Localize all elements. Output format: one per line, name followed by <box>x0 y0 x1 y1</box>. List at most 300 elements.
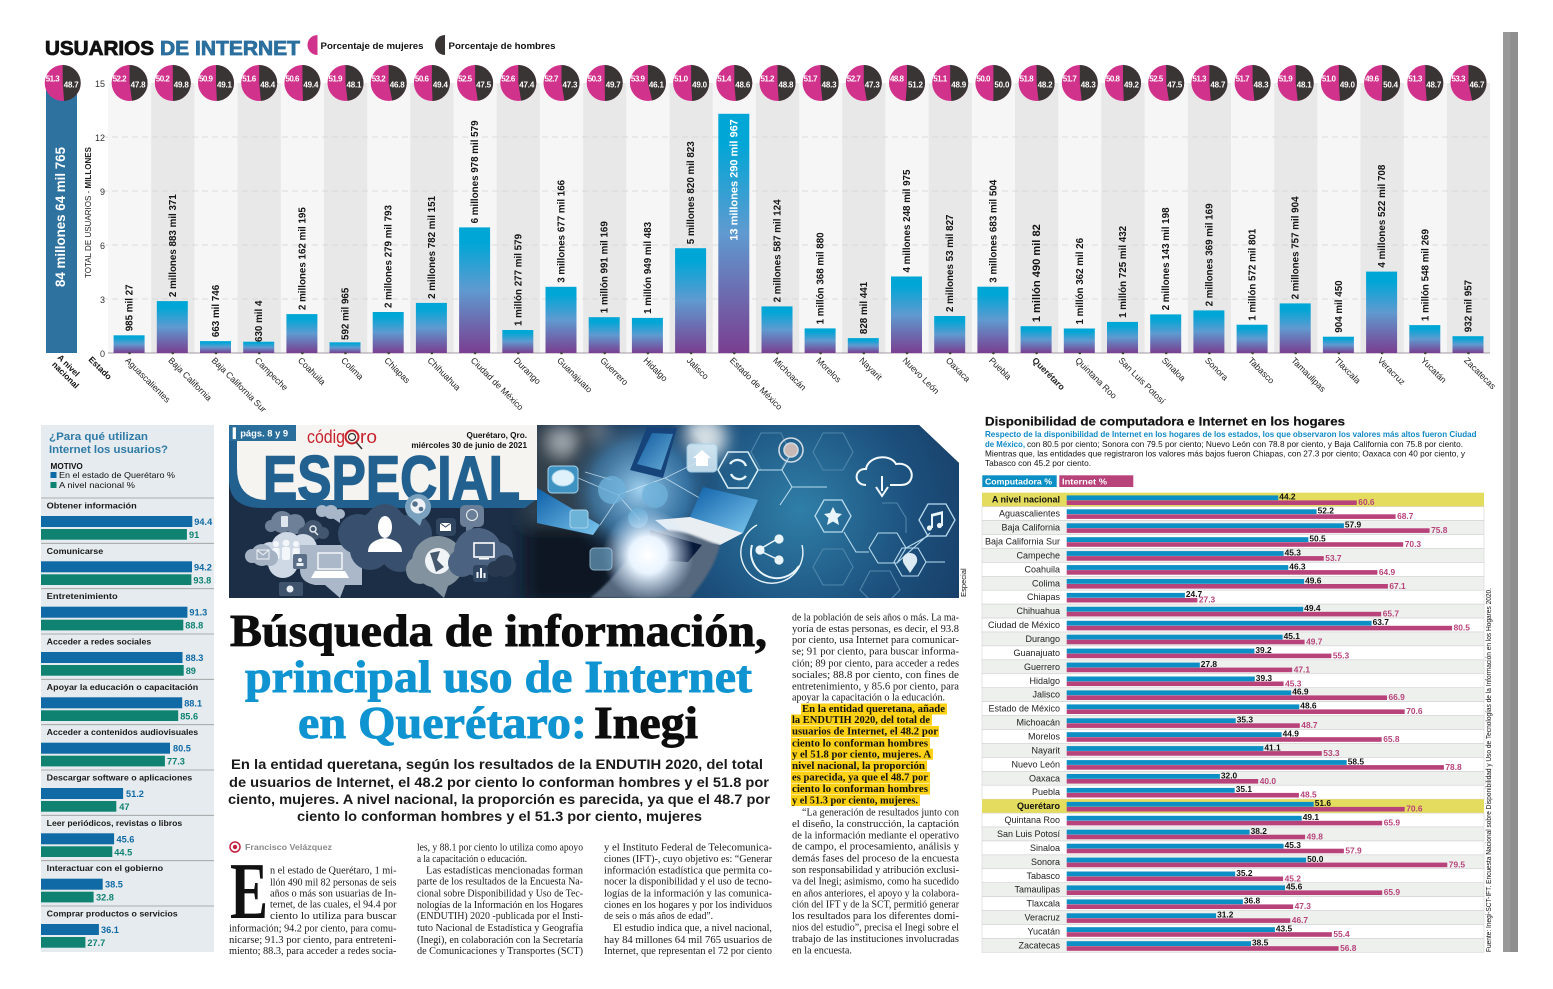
row: Morelos: 65.8 <box>1383 734 1400 744</box>
article column 4 continued: en años anteriores, el apoyo y la colabora- <box>792 888 960 899</box>
row: Sonora: 50.0 <box>1307 854 1324 864</box>
legend: internet <box>1059 475 1133 487</box>
article column 1: ternet, de las cuales, el 94.4 por <box>270 900 397 911</box>
column: Baja California: 2 millones 883 mil 371 <box>168 194 179 297</box>
article column 4: entretenimiento, y 85.6 por ciento, para <box>792 682 959 693</box>
column: Baja California: 50.2 <box>156 74 170 84</box>
article column 4: ción; 89 por ciento, para acceder a redes <box>792 658 959 669</box>
row: leer periódicos: Leer periódicos, revistas o libros <box>47 818 182 828</box>
row: Nuevo León <box>982 756 1484 772</box>
article column 4 continued: son responsabilidad y atribución exclusi- <box>792 865 960 876</box>
column: Puebla: Puebla <box>987 355 1014 382</box>
column: Chiapas: 46.8 <box>390 80 405 90</box>
column: Oaxaca: 2 millones 53 mil 827 <box>945 214 956 312</box>
column: Campeche: Campeche <box>253 355 290 393</box>
row: Hidalgo <box>982 673 1484 688</box>
article column 2: nologías de la Información en los Hogares <box>417 900 583 911</box>
row: apoyar la educación <box>41 679 214 721</box>
source note: Fuente: Inegi-SCT-IFT. Encuesta Nacional sobre Disponibilidad y Uso de Tecnologías de la Información en los Hogares 2020. <box>1484 588 1493 952</box>
row: Baja California Sur: 50.5 <box>1309 534 1326 544</box>
y axis labels: 0 <box>100 349 105 359</box>
row: Colima: Colima <box>1032 578 1060 588</box>
row: Puebla <box>982 784 1484 800</box>
page tab <box>229 425 296 441</box>
y axis labels <box>83 79 105 359</box>
article column 2 <box>417 842 584 957</box>
national total bar: 51.3 <box>46 74 60 84</box>
legend: porcentaje de mujeres: Porcentaje de mujeres <box>320 41 424 51</box>
column: Aguascalientes: 985 mil 27 <box>125 284 136 331</box>
row: Aguascalientes: 68.7 <box>1397 511 1414 521</box>
row: Jalisco: 46.9 <box>1292 687 1309 697</box>
deck: En la entidad queretana, según los resultados de la ENDUTIH 2020, del total <box>231 757 763 772</box>
column: Nuevo León: 48.8 <box>890 74 905 84</box>
row: leer periódicos: 44.5 <box>114 847 132 857</box>
article column 4: yoría de estas personas, es decir, el 93.8 <box>792 624 959 635</box>
column: Chihuahua: Chihuahua <box>425 355 463 393</box>
column: Tabasco: 51.7 <box>1236 74 1250 84</box>
column: Oaxaca: 51.1 <box>933 74 948 84</box>
article column 4 continued: los resultados para los diferentes domi- <box>792 911 960 922</box>
column: Tabasco: Tabasco <box>1246 355 1277 386</box>
article column 3: ciones (IFT)-, cuyo objetivo es: “Generar <box>604 854 773 865</box>
column: Veracruz: 49.6 <box>1365 74 1380 84</box>
row: Baja California Sur: Baja California Sur <box>985 536 1060 546</box>
panel: disponibilidad intro text: con 80.5 por ciento; Sonora con 79.5 por ciento; Nuevo León con 78.8 por ciento, y Baja California con 75.8 por ciento. <box>1027 440 1463 449</box>
row: apoyar la educación: 88.1 <box>184 698 202 708</box>
row: Guanajuato: 55.3 <box>1333 650 1350 660</box>
column: San Luis Potosí: 50.8 <box>1106 74 1121 84</box>
highlighted paragraph: En la entidad queretana, añade <box>802 704 945 715</box>
row: obtener información: 91 <box>189 530 199 540</box>
panel heading <box>49 431 168 456</box>
column: Chiapas <box>371 65 413 386</box>
row: Tabasco <box>982 868 1484 883</box>
row: Yucatán: 55.4 <box>1333 929 1350 939</box>
article column 2: tuto Nacional de Estadística y Geografía <box>417 923 583 934</box>
row: Veracruz: 46.7 <box>1292 915 1308 925</box>
article column 4: de la población de seis años o más. La ma- <box>792 612 959 623</box>
y axis labels: 3 <box>100 295 105 305</box>
article column 4 continued: el diseño, la construcción, la captación <box>792 819 960 830</box>
y axis labels: 6 <box>100 241 105 251</box>
panel: disponibilidad heading: Disponibilidad de computadora e Internet en los hogares <box>985 414 1345 428</box>
row: Colima: 49.6 <box>1305 575 1322 585</box>
article column 1: nicarse; 91.3 por ciento, para entreteni- <box>229 935 397 946</box>
highlighted paragraph: y el 51.8 por ciento, mujeres. A <box>792 749 931 760</box>
column: Durango: 52.6 <box>501 74 516 84</box>
row: Sinaloa: Sinaloa <box>1030 843 1060 853</box>
column: Hidalgo: Hidalgo <box>641 355 670 384</box>
row: Puebla: Puebla <box>1032 787 1060 797</box>
row: Morelos: Morelos <box>1028 732 1060 742</box>
row: comunicarse <box>41 543 214 585</box>
column: Sonora: Sonora <box>1203 355 1230 383</box>
row: Michoacán: Michoacán <box>1016 718 1060 728</box>
row: Yucatán <box>982 924 1484 939</box>
column: Yucatán: 48.7 <box>1426 80 1442 90</box>
bubble: monitor <box>448 528 516 582</box>
column: San Luis Potosí: 1 millón 725 mil 432 <box>1118 225 1129 318</box>
column: Guerrero <box>587 65 630 387</box>
article column 2: de Comunicaciones y Transportes (SCT) <box>417 946 583 957</box>
article column 2: cional sobre Disponibilidad y Uso de Tec- <box>417 888 584 899</box>
title: usuarios de internet <box>45 38 300 60</box>
panel: disponibilidad intro text: Tabasco con 45.2 por ciento. <box>985 459 1091 468</box>
row: Querétaro <box>982 798 1484 814</box>
national total bar <box>45 65 82 390</box>
column: Veracruz: 4 millones 522 mil 708 <box>1377 164 1388 268</box>
title: usuarios de internet: DE INTERNET <box>160 38 300 60</box>
date line: miércoles 30 de junio de 2021 <box>411 441 527 450</box>
row: Chiapas: Chiapas <box>1027 592 1060 602</box>
row: Veracruz: 31.2 <box>1217 910 1234 920</box>
column: Zacatecas <box>1450 65 1498 392</box>
column: Yucatán: 1 millón 548 mil 269 <box>1420 229 1431 321</box>
row: Querétaro: Querétaro <box>1017 801 1061 811</box>
row: acceder a contenidos audiovisuales: 77.3 <box>167 757 185 767</box>
row: Ciudad de México: Ciudad de México <box>988 620 1060 630</box>
logo: código oro <box>308 430 376 450</box>
row: interactuar con el gobierno: 38.5 <box>105 880 123 890</box>
column: Guerrero: Guerrero <box>598 355 630 387</box>
panel legend <box>50 462 175 490</box>
column: Nayarit <box>846 65 885 383</box>
panel: disponibilidad intro text <box>985 430 1476 468</box>
column: Ciudad de México: 6 millones 978 mil 579 <box>470 120 481 223</box>
article column 3: ciones en los hogares y por los individuos <box>604 900 772 911</box>
row: Quintana Roo: 65.9 <box>1384 818 1400 828</box>
highlighted paragraph: ciento lo conforman hombres <box>792 738 928 749</box>
column: Baja California Sur: 663 mil 746 <box>211 284 222 337</box>
article column 3: El estudio indica que, a nivel nacional, <box>613 923 772 934</box>
icon: star <box>824 507 842 525</box>
row: Chihuahua <box>982 603 1484 619</box>
panel legend: MOTIVO <box>50 462 83 471</box>
column: Estado de México: 51.4 <box>717 74 732 84</box>
column: Chihuahua: 49.4 <box>433 80 448 90</box>
row: Aguascalientes: 52.2 <box>1318 506 1334 516</box>
row: Nayarit <box>982 742 1484 758</box>
bubble: envelope <box>245 544 278 566</box>
article column 3: de seis o más años de edad”. <box>604 911 713 922</box>
row: Guanajuato <box>982 645 1484 660</box>
column: Tamaulipas: 2 millones 757 mil 904 <box>1291 196 1302 299</box>
row: Sinaloa: 45.3 <box>1285 840 1301 850</box>
column: Hidalgo <box>630 65 670 384</box>
column: Ciudad de México: 52.5 <box>458 74 473 84</box>
row: Oaxaca <box>982 770 1484 786</box>
column: Querétaro: 1 millón 490 mil 82 <box>1031 224 1043 322</box>
row: Tlaxcala: 47.3 <box>1295 901 1311 911</box>
column: Sinaloa: 52.5 <box>1149 74 1164 84</box>
column: Colima: 51.9 <box>328 74 343 84</box>
panel heading: Internet los usuarios? <box>49 444 168 456</box>
national total bar: nacional <box>50 359 81 390</box>
column: Quintana Roo: 48.3 <box>1081 80 1096 90</box>
row: Tabasco: Tabasco <box>1026 871 1060 881</box>
row: entretenimiento: Entretenimiento <box>47 591 118 601</box>
page tab: ▍págs. 8 y 9 <box>232 428 288 440</box>
column: Sonora: 51.3 <box>1192 74 1207 84</box>
column: Estado de México: 13 millones 290 mil 967 <box>728 119 740 241</box>
column: Tlaxcala: 904 mil 450 <box>1334 280 1345 333</box>
column: Colima: Colima <box>339 355 366 382</box>
row: Puebla: 35.1 <box>1236 784 1252 794</box>
article column 4 continued: trabajo de las instituciones involucradas <box>792 934 959 945</box>
column: Tlaxcala: 49.0 <box>1340 80 1355 90</box>
logo: código oro: ro <box>360 427 377 447</box>
row: Chiapas <box>982 589 1484 605</box>
row: interactuar con el gobierno: Interactuar con el gobierno <box>47 863 163 873</box>
legend: internet: Internet % <box>1062 477 1108 486</box>
row: Zacatecas: Zacatecas <box>1018 940 1060 950</box>
row: Tlaxcala <box>982 896 1484 911</box>
row: Coahuila: 64.9 <box>1379 567 1396 577</box>
row: acceder a contenidos audiovisuales <box>41 725 214 767</box>
column: Veracruz: Veracruz <box>1376 355 1407 387</box>
column: Baja California: Baja California <box>166 355 214 403</box>
panel: disponibilidad intro text: Respecto de la disponibilidad de Internet en los hogares de los estados, los que observaron los valores más altos fueron Ciudad <box>985 430 1476 439</box>
row: Sonora <box>982 854 1484 869</box>
column: Zacatecas: 932 mil 957 <box>1464 279 1474 332</box>
column: Colima: 48.1 <box>346 80 362 90</box>
column: Guanajuato: 3 millones 677 mil 166 <box>556 179 568 283</box>
row: Chihuahua: 49.4 <box>1304 603 1321 613</box>
row: Campeche: 45.3 <box>1285 547 1301 557</box>
panel: disponibilidad intro text: de México, <box>985 440 1025 449</box>
row: Baja California Sur: 70.3 <box>1405 539 1421 549</box>
row: Guanajuato: 39.2 <box>1255 645 1272 655</box>
column: Michoacán: 48.8 <box>778 80 794 90</box>
article column 4: apoyar la capacitación o la educación. <box>792 692 945 703</box>
row: descargar software: 51.2 <box>126 789 144 799</box>
article column 4 continued: va del Inegi; asimismo, como ha sucedido <box>792 877 959 888</box>
column: Tamaulipas: 51.9 <box>1279 74 1293 84</box>
bubble: globe <box>406 536 464 598</box>
column: Nuevo León: 51.2 <box>908 80 924 90</box>
row: acceder a redes sociales <box>41 634 214 676</box>
row: acceder a contenidos audiovisuales: Acceder a contenidos audiovisuales <box>47 727 198 737</box>
row: comunicarse: 93.8 <box>193 575 211 585</box>
row: Tabasco: 35.2 <box>1236 868 1253 878</box>
row: Tlaxcala: Tlaxcala <box>1026 899 1060 909</box>
headline <box>230 605 767 748</box>
deck: ciento lo conforman hombres y el 51.3 por ciento, mujeres <box>297 809 702 824</box>
photo devices and hand <box>537 427 758 601</box>
row: Tamaulipas <box>982 882 1484 897</box>
column: Aguascalientes: 47.8 <box>131 80 146 90</box>
article column 2: (Inegi), en colaboración con la Secretaría <box>417 935 583 946</box>
column: Sonora: 2 millones 369 mil 169 <box>1204 203 1215 306</box>
article column 4 continued: demás fases del proceso de la encuesta <box>792 853 959 864</box>
column: Jalisco: Jalisco <box>685 355 711 382</box>
article column 3: logías de la información y las comunica- <box>604 888 773 899</box>
column: Nayarit: 52.7 <box>847 74 861 84</box>
drop cap: E <box>230 848 268 936</box>
row: Ciudad de México <box>982 617 1484 633</box>
column: Campeche: 51.6 <box>242 74 257 84</box>
social media speech bubbles <box>245 494 516 598</box>
column: Coahuila: 49.4 <box>303 80 319 90</box>
column: Guanajuato: Guanajuato <box>555 355 594 395</box>
column: Chihuahua: 50.6 <box>415 74 429 84</box>
article column 1 <box>229 866 397 957</box>
column: Guerrero: 50.3 <box>588 74 602 84</box>
icon: touch <box>779 438 803 462</box>
bubble: envelope dark <box>436 518 456 536</box>
row: Estado de México: 48.6 <box>1300 701 1317 711</box>
column: Guanajuato: 52.7 <box>544 74 559 84</box>
row: obtener información: Obtener información <box>47 500 137 510</box>
row: Guanajuato: Guanajuato <box>1013 648 1060 658</box>
row: Quintana Roo <box>982 812 1484 828</box>
column: Veracruz: 50.4 <box>1383 80 1399 90</box>
column: Ciudad de México: 47.5 <box>476 80 492 90</box>
row: Baja California Sur <box>982 534 1484 549</box>
column: Chiapas: 53.2 <box>372 74 386 84</box>
column: Michoacán: 51.2 <box>760 74 775 84</box>
row: Puebla: 48.5 <box>1300 790 1317 800</box>
column: Zacatecas: 53.3 <box>1452 74 1466 84</box>
y axis labels: 15 <box>95 79 105 89</box>
row: Veracruz: Veracruz <box>1024 913 1060 923</box>
highlighted paragraph: usuarios de Internet, el 48.2 por <box>792 727 938 738</box>
legend: porcentaje de mujeres <box>308 35 424 55</box>
photo credit: Especial <box>959 568 968 597</box>
row: Oaxaca: 32.0 <box>1221 770 1238 780</box>
row: interactuar con el gobierno <box>41 861 214 903</box>
byline: Francisco Velázquez <box>245 842 332 852</box>
row: Tlaxcala: 36.8 <box>1244 896 1261 906</box>
row: a nivel nacional: 44.2 <box>1279 492 1296 502</box>
row: apoyar la educación: Apoyar la educación o capacitación <box>47 682 198 692</box>
article column 4 continued: “La generación de resultados junto con <box>802 808 960 819</box>
bubble: globe top <box>405 494 431 526</box>
row: San Luis Potosí <box>982 826 1484 842</box>
article column 3: Internet, que representan el 72 por ciento <box>604 946 772 957</box>
row: Durango: 45.1 <box>1284 631 1300 641</box>
column: Guanajuato: 47.3 <box>562 80 578 90</box>
row: Durango <box>982 631 1484 646</box>
column: Querétaro: Querétaro <box>1030 355 1067 393</box>
column: Tamaulipas: 48.1 <box>1297 80 1312 90</box>
column: Sinaloa: 2 millones 143 mil 198 <box>1161 207 1172 310</box>
row: Nuevo León: 58.5 <box>1348 756 1364 766</box>
column: Sonora: 48.7 <box>1210 80 1226 90</box>
column: Jalisco: 5 millones 820 mil 823 <box>686 141 697 244</box>
highlighted paragraph: la ENDUTIH 2020, del total de <box>792 715 930 726</box>
row: leer periódicos: 45.6 <box>116 834 134 844</box>
column: Tabasco <box>1235 65 1277 386</box>
row: Estado de México: Estado de México <box>988 704 1060 714</box>
row: Nuevo León: Nuevo León <box>1011 759 1060 769</box>
column: Oaxaca <box>932 65 972 384</box>
headline: principal uso de Internet <box>245 651 753 702</box>
row: Campeche: 53.7 <box>1325 553 1342 563</box>
column: Querétaro <box>1019 65 1067 393</box>
row: Sonora: Sonora <box>1031 857 1060 867</box>
column: Morelos: 1 millón 368 mil 880 <box>816 232 827 324</box>
headline: en Querétaro: <box>298 697 587 748</box>
icon: cloud download <box>857 457 912 496</box>
panel legend: A nivel nacional % <box>59 481 135 490</box>
icon: music note <box>927 511 943 531</box>
panel: disponibilidad intro text: Mientras que, las entidades que registraron los valores más bajos fueron Chiapas, con 27.3 por ciento; Oaxaca con 40 por ciento, y <box>985 450 1466 459</box>
column: Chihuahua <box>414 65 463 393</box>
row: Tabasco: 45.2 <box>1285 873 1301 883</box>
article column 4: se; 91 por ciento, para buscar informa- <box>792 647 960 658</box>
row: Tamaulipas: Tamaulipas <box>1014 885 1060 895</box>
column: Baja California Sur: Baja California Sur <box>210 355 269 414</box>
row: Colima <box>982 575 1484 591</box>
column: Tlaxcala <box>1321 65 1363 386</box>
article column 3: información estadística que permita co- <box>604 866 773 877</box>
date line: Querétaro, Qro. <box>466 431 527 440</box>
column: Jalisco: 51.0 <box>674 74 689 84</box>
column: Jalisco: 49.0 <box>692 80 708 90</box>
column: Zacatecas: Zacatecas <box>1462 355 1498 392</box>
row: comprar productos <box>41 906 214 948</box>
legend: computadora <box>982 475 1057 487</box>
column: Nayarit: 47.3 <box>865 80 880 90</box>
bubble: people cloud <box>259 532 317 578</box>
row: apoyar la educación: 85.6 <box>180 711 198 721</box>
column: Colima <box>328 65 366 382</box>
row: entretenimiento: 88.8 <box>185 621 203 631</box>
row: Guerrero: Guerrero <box>1024 662 1060 672</box>
bubble: person <box>338 504 432 572</box>
column: Baja California <box>155 65 214 403</box>
row: Hidalgo: Hidalgo <box>1029 676 1060 686</box>
row: Coahuila: 46.3 <box>1289 561 1306 571</box>
column: Durango <box>500 65 543 386</box>
column: Campeche: 48.4 <box>260 80 276 90</box>
y axis labels: 12 <box>95 133 105 143</box>
row: Nayarit: 53.3 <box>1323 748 1340 758</box>
row: Querétaro: 51.6 <box>1315 798 1331 808</box>
row: Tamaulipas: 45.6 <box>1286 882 1303 892</box>
row: Sinaloa <box>982 840 1484 856</box>
column: Tabasco: 1 millón 572 mil 801 <box>1248 228 1259 321</box>
column: Michoacán <box>760 65 808 393</box>
row: Quintana Roo: 49.1 <box>1303 812 1319 822</box>
bubble: laptop <box>279 545 362 598</box>
column: Tamaulipas <box>1278 65 1328 394</box>
row: Michoacán <box>982 715 1484 730</box>
column: Nayarit: Nayarit <box>857 355 885 383</box>
column: Colima: 592 mil 965 <box>340 287 352 340</box>
column: Quintana Roo: 51.7 <box>1063 74 1077 84</box>
icon: refresh <box>730 460 746 479</box>
column: Puebla: 3 millones 683 mil 504 <box>988 179 999 283</box>
legend: porcentaje de hombres <box>435 35 556 55</box>
column: Coahuila: 2 millones 162 mil 195 <box>297 207 308 310</box>
column: Morelos: 51.7 <box>804 74 818 84</box>
row: Zacatecas: 56.8 <box>1340 943 1357 953</box>
column: Sinaloa <box>1148 65 1188 383</box>
highlighted paragraph: nivel nacional, la proporción <box>792 761 925 772</box>
row: interactuar con el gobierno: 32.8 <box>96 893 114 903</box>
hexagon network graphics <box>718 433 955 600</box>
row: Sonora: 79.5 <box>1449 859 1465 869</box>
article column 1: llón 490 mil 82 personas de seis <box>270 878 396 888</box>
article column 2: parte de los resultados de la Encuesta Na- <box>417 877 584 888</box>
article column 1: años o más son usuarias de In- <box>270 889 397 900</box>
row: Jalisco <box>982 687 1484 702</box>
column: Coahuila <box>284 65 328 387</box>
row: a nivel nacional: 60.6 <box>1358 497 1375 507</box>
